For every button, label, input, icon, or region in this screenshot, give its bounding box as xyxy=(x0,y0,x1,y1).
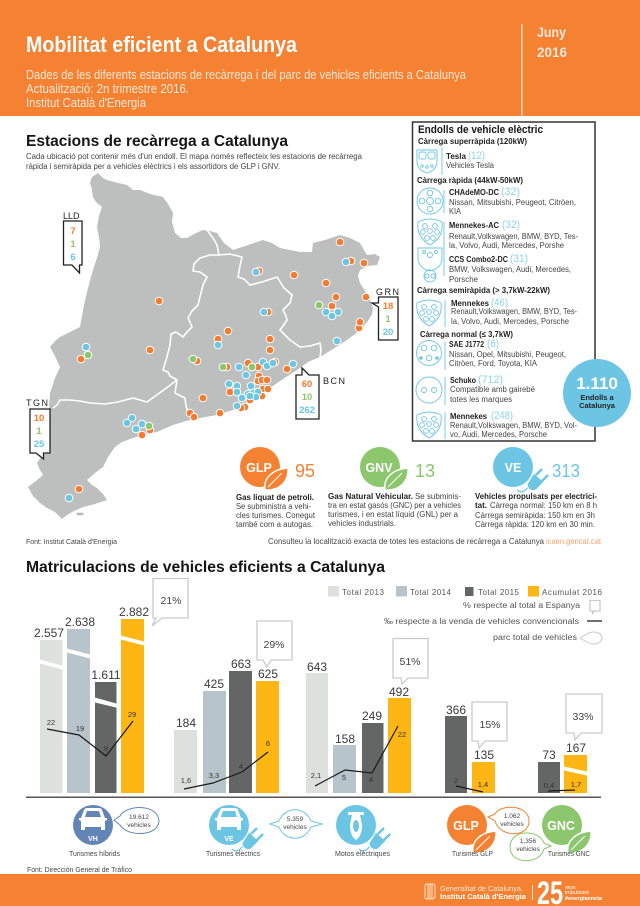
category: semi-fast charging: Càrrega semiràpida (> 3,7kW-22kW) xyxy=(417,286,550,295)
map intro text: Cada ubicació pot contenir més d'un endoll. El mapa només reflecteix les estacions de recàrrega xyxy=(26,152,363,161)
category: LPG cars: vehicles xyxy=(500,821,524,828)
fuel: GLP: GLP xyxy=(246,461,272,475)
plug: Mennekes normal xyxy=(417,410,577,439)
fuel: GNV: GNV xyxy=(365,461,393,475)
plug: Mennekes normal: Renault,Volkswagen, BMW, BYD, Vol- xyxy=(450,421,577,430)
chart: hybrid cars: 2.638 xyxy=(65,615,95,629)
plug: Schuko: (712) xyxy=(478,374,503,386)
bubble: electric vehicles total: vehicles xyxy=(283,824,307,831)
chart: electric cars: 625 xyxy=(258,667,278,681)
category: electric cars: VE xyxy=(224,836,234,843)
header band xyxy=(0,0,640,116)
plug: CHAdeMO: (32) xyxy=(501,186,520,198)
link note: Consulteu la localització exacta de totes les estacions de recàrrega a Catalunya xyxy=(268,537,545,546)
category: electric cars xyxy=(206,805,263,858)
legend: Acumulat 2016 xyxy=(542,588,603,597)
legend: % respecte al total a Espanya xyxy=(463,601,581,610)
map intro text xyxy=(26,152,363,171)
source: registrations: Font: Dirección General de Tráfico xyxy=(27,867,132,874)
plug: CCS Combo2: BMW, Volkswagen, Audi, Mercedes, xyxy=(449,265,571,274)
plug: Mennekes normal: (248) xyxy=(491,410,513,422)
chart: CNG cars: 167 xyxy=(566,741,586,755)
map intro text: ràpida i semiràpida per a vehicles elèctrics i els assortidors de GLP i GNV. xyxy=(26,162,280,171)
footer institution: Institut Català d'Energia xyxy=(440,894,526,901)
fuel: VE: Càrrega normal: 150 km en 8 h xyxy=(490,501,597,510)
plug: Tesla: (12) xyxy=(468,150,485,162)
legend: Total 2014 xyxy=(410,588,452,597)
plug: SAE J1772: Nissan, Opel, Mitsubishi, Peugeot, xyxy=(449,350,566,359)
callout: BCN: 10 xyxy=(302,392,312,403)
chart: hybrid cars: 2.557 xyxy=(34,626,64,640)
title: Mobilitat eficient a Catalunya xyxy=(26,32,298,57)
subtitle xyxy=(26,67,467,110)
fuel: VE: tat. xyxy=(475,501,487,510)
subtitle: Dades de les diferents estacions de recàrrega i del parc de vehicles eficients a Catalunya xyxy=(26,67,467,82)
fuel: VE: Càrrega ràpida: 120 km en 30 min. xyxy=(475,520,595,529)
logo: Generalitat xyxy=(425,884,435,899)
chart: LPG cars: 135 xyxy=(474,748,494,762)
bubble: electric vehicles total xyxy=(270,810,322,838)
total plugs badge: Endolls a xyxy=(580,393,614,402)
chart: electric motorbikes: 51% xyxy=(399,656,421,668)
chart: CNG cars: 73 xyxy=(542,748,556,762)
chart: electric motorbikes: 22 xyxy=(398,730,406,739)
fuel: GNV xyxy=(328,447,461,528)
callout: LLD: 7 xyxy=(70,226,76,237)
chart: electric cars: 425 xyxy=(204,677,224,691)
plug: Mennekes semi-fast xyxy=(417,297,577,327)
plug: Mennekes normal: Mennekes xyxy=(450,412,488,421)
plug: CCS Combo2: CCS Combo2-DC xyxy=(449,255,508,264)
date: Juny xyxy=(537,24,566,40)
category: CNG cars xyxy=(510,805,591,861)
plug: Mennekes semi-fast: Mennekes xyxy=(451,299,490,308)
category: CNG cars: 1.356 xyxy=(520,838,537,845)
category: CNG cars: GNC xyxy=(547,819,575,833)
plug: Schuko: Compatible amb gairebé xyxy=(450,385,536,394)
fuel: VE: VE xyxy=(505,461,521,475)
callout: BCN: BCN xyxy=(323,376,345,386)
plug: Mennekes-AC: (32) xyxy=(502,219,520,231)
subtitle: Actualització: 2n trimestre 2016. xyxy=(26,81,189,96)
fuel: GNV: Gas Natural Vehicular. xyxy=(328,492,413,501)
callout: TGN: 10 xyxy=(34,413,44,424)
footer institution: Generalitat de Catalunya. xyxy=(440,886,523,893)
callout: BCN xyxy=(296,368,345,419)
anniversary logo: #energiaeneta xyxy=(565,896,602,902)
category: CNG cars: vehicles xyxy=(516,846,540,853)
plug: CHAdeMO xyxy=(417,186,576,216)
callout: BCN: 60 xyxy=(302,379,312,390)
anniversary logo: impulsant xyxy=(565,890,590,896)
fuel: VE xyxy=(475,447,597,529)
chart: hybrid cars: 19 xyxy=(76,724,84,733)
category: CNG cars: Turismes GNC xyxy=(548,851,590,858)
chart: LPG cars: 15% xyxy=(479,719,501,731)
callout: TGN: 1 xyxy=(36,426,42,437)
legend: Total 2013 xyxy=(342,588,385,597)
category: LPG cars: Turismes GLP xyxy=(452,851,493,858)
chart: electric motorbikes: 2,1 xyxy=(311,771,321,780)
chart: electric motorbikes: 5 xyxy=(342,773,346,782)
chart: hybrid cars xyxy=(34,578,188,793)
chart: electric cars: 29% xyxy=(263,639,285,651)
total plugs badge xyxy=(563,359,631,427)
fuel: VE: Vehicles propulsats per electrici- xyxy=(475,492,597,501)
plug: CHAdeMO: Nissan, Mitsubishi, Peugeot, Citròen, xyxy=(449,198,576,207)
callout: LLD xyxy=(63,211,82,273)
callout: GRN: 20 xyxy=(383,327,393,338)
chart: electric cars xyxy=(174,621,292,793)
callout: GRN: 18 xyxy=(383,301,393,312)
plug: Schuko xyxy=(416,374,536,405)
plug: SAE J1772: Citròen, Ford, Toyota, KIA xyxy=(449,359,538,368)
category: hybrid cars: vehicles xyxy=(127,822,151,829)
plug: CHAdeMO: CHAdeMO-DC xyxy=(449,188,499,197)
chart: LPG cars: 1,4 xyxy=(478,780,488,789)
category: fast charging: Càrrega ràpida (44kW-50kW) xyxy=(417,176,523,185)
category: hybrid cars xyxy=(69,805,159,858)
footer institution xyxy=(440,886,526,901)
chart: CNG cars: 1,7 xyxy=(571,780,581,789)
callout: GRN: 1 xyxy=(385,314,391,325)
callout: TGN: 25 xyxy=(34,439,45,450)
chart: hybrid cars: 2.882 xyxy=(119,605,149,619)
plug: CCS Combo2: Porsche xyxy=(449,275,479,284)
category: electric motorbikes: Motos elèctriques xyxy=(335,851,391,858)
fuel: GNV: turismes, i en estat líquid (GNL) per a xyxy=(328,510,459,519)
plug: SAE J1772: SAE J1772 xyxy=(449,340,484,349)
chart: electric motorbikes: 4 xyxy=(369,775,373,784)
plug: Schuko: totes les marques xyxy=(450,395,512,404)
fuel: GLP: cles turismes. Conegut xyxy=(236,511,316,520)
chart: electric cars: 6 xyxy=(266,739,270,748)
chart: electric motorbikes xyxy=(306,638,428,793)
plug: Tesla: Vehicles Tesla xyxy=(446,161,495,170)
chart: electric motorbikes: 249 xyxy=(362,709,382,723)
map of Catalonia xyxy=(28,173,380,519)
chart: CNG cars: 0,4 xyxy=(544,781,554,790)
category: hybrid cars: Turismes híbrids xyxy=(69,851,120,858)
plug: SAE J1772 xyxy=(416,338,566,370)
heading: stations: Estacions de recàrrega a Catalunya xyxy=(26,133,288,150)
chart: CNG cars xyxy=(538,694,602,793)
category: LPG cars: 1.062 xyxy=(504,813,521,820)
panel heading: Endolls de vehicle elèctric xyxy=(418,124,543,136)
chart: electric motorbikes: 492 xyxy=(389,685,409,699)
legend: ‰ respecte a la venda de vehicles convencionals xyxy=(384,617,579,626)
anniversary logo xyxy=(537,875,602,906)
callout: TGN: TGN xyxy=(26,398,48,408)
chart: LPG cars: 366 xyxy=(446,703,466,717)
chart: electric cars: 663 xyxy=(231,657,251,671)
fuel: GNV: 13 xyxy=(415,461,435,481)
chart: electric motorbikes: 643 xyxy=(307,660,327,674)
panel: plug types xyxy=(412,122,595,441)
plug: SAE J1772: (6) xyxy=(487,338,499,350)
category: hybrid cars: 19.612 xyxy=(129,814,149,821)
fuel: GLP xyxy=(236,447,316,529)
fuel: GLP: també com a autogas. xyxy=(236,520,313,529)
category: normal charging: Càrrega normal (≤ 3,7kW) xyxy=(420,330,513,339)
chart: hybrid cars: 29 xyxy=(128,710,136,719)
category: electric motorbikes xyxy=(335,805,391,858)
legend xyxy=(328,586,603,644)
category: LPG cars xyxy=(447,805,529,858)
legend: parc total de vehicles xyxy=(493,633,577,642)
bubble: electric vehicles total: 5.359 xyxy=(287,816,304,823)
chart: electric motorbikes: 158 xyxy=(335,732,355,746)
category: electric cars: Turismes elèctrics xyxy=(206,851,260,858)
fuel: GLP: 95 xyxy=(295,461,315,481)
fuel: GLP: Se subministra a vehi- xyxy=(236,502,311,511)
fuel: VE: Càrrega semiràpida: 150 km en 3h xyxy=(475,511,595,520)
chart: hybrid cars: 22 xyxy=(47,718,55,727)
plug: Tesla: Tesla xyxy=(446,152,467,161)
plug: CHAdeMO: KIA xyxy=(449,207,462,216)
source: map: Font: Institut Català d'Energia xyxy=(26,539,117,546)
plug: Mennekes-AC: Mennekes-AC xyxy=(449,221,499,230)
plug: CCS Combo2 xyxy=(418,248,571,284)
chart: hybrid cars: 9 xyxy=(104,744,108,753)
fuel: GNV: Se subminis- xyxy=(415,492,461,501)
fuel: GNV: vehicles industrials. xyxy=(328,519,396,528)
fuel: VE: 313 xyxy=(552,461,580,481)
plug: Mennekes normal: vo, Audi, Mercedes, Porsche xyxy=(450,430,548,439)
chart: hybrid cars: 1.611 xyxy=(91,668,121,682)
chart: electric cars: 1,6 xyxy=(181,776,191,785)
legend: Total 2015 xyxy=(478,588,520,597)
callout: GRN xyxy=(372,287,399,340)
callout: LLD: 6 xyxy=(70,252,76,263)
footer band xyxy=(0,874,640,906)
callout: BCN: 262 xyxy=(299,405,315,416)
total plugs badge: 1.110 xyxy=(576,374,618,393)
date xyxy=(537,24,567,60)
fuel: GNV: tra en estat gasós (GNC) per a vehicles xyxy=(328,501,461,510)
plug: Mennekes semi-fast: Renault,Volkswagen, BMW, BYD, Tes- xyxy=(451,307,577,316)
chart: hybrid cars: 21% xyxy=(160,595,182,607)
chart: LPG cars: 2 xyxy=(454,776,458,785)
total plugs badge: Catalunya xyxy=(579,401,616,410)
heading: registrations: Matriculacions de vehicles eficients a Catalunya xyxy=(26,559,385,576)
plug: Schuko: Schuko xyxy=(450,376,476,385)
chart: CNG cars: 33% xyxy=(572,711,594,723)
plug: CCS Combo2: (31) xyxy=(510,253,528,265)
fuel: GLP: Gas liquat de petroli. xyxy=(236,493,314,502)
plug: Mennekes-AC xyxy=(418,219,578,276)
plug: Mennekes semi-fast: la, Volvo, Audi, Mercedes, Porsche xyxy=(451,317,570,326)
callout: LLD: 1 xyxy=(70,239,76,250)
callout: TGN xyxy=(26,398,50,459)
category: LPG cars: GLP xyxy=(453,819,479,833)
plug: Mennekes semi-fast: (46) xyxy=(491,297,508,309)
category: hybrid cars: VH xyxy=(88,836,98,843)
chart: electric cars: 3,3 xyxy=(209,771,219,780)
station dots xyxy=(65,238,370,502)
chart: LPG cars xyxy=(445,702,507,793)
chart: electric cars: 4 xyxy=(239,762,243,771)
link note: icaen.gencat.cat xyxy=(546,537,602,546)
date: 2016 xyxy=(537,44,567,60)
anniversary logo: anys xyxy=(565,885,576,891)
plug: Mennekes-AC: Renault,Volkswagen, BMW, BYD, Tes- xyxy=(449,232,578,241)
subtitle: Institut Català d'Energia xyxy=(26,95,147,110)
plug: Tesla xyxy=(417,147,495,175)
plug: Mennekes-AC: la, Volvo, Audi, Mercedes, Porshe xyxy=(449,241,565,250)
chart: electric cars: 184 xyxy=(176,716,196,730)
callout: GRN: GRN xyxy=(376,287,399,297)
callout: LLD: LLD xyxy=(63,211,80,221)
category: ultra-fast charging: Càrrega superràpida (120kW) xyxy=(418,137,527,146)
